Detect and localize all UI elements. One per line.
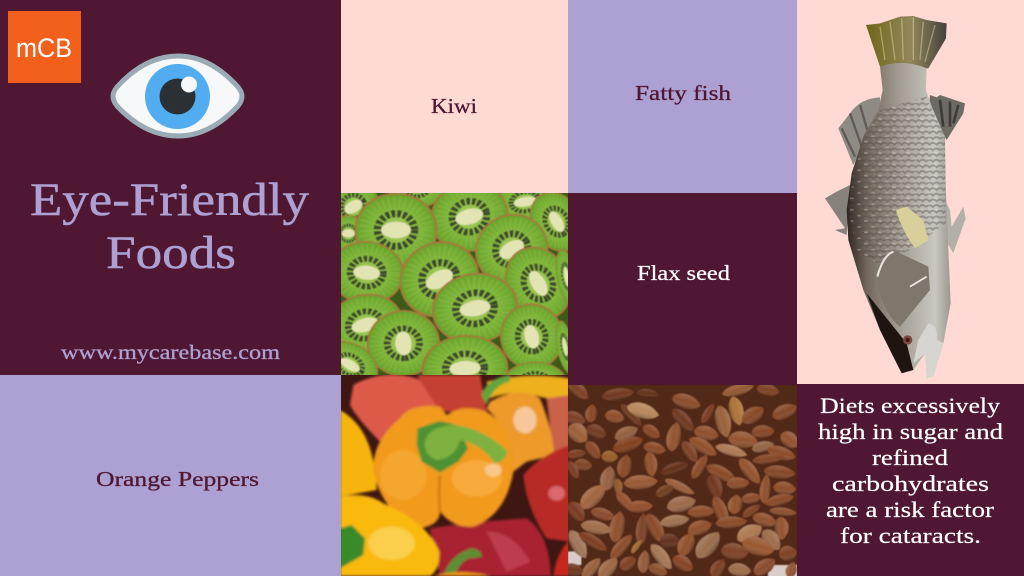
pepper: red right <box>523 445 570 542</box>
pepper: red back far right <box>547 395 570 455</box>
logo: mCB <box>8 11 81 83</box>
panel: flax seed label <box>568 193 797 385</box>
title <box>30 174 310 279</box>
panel: kiwi label <box>341 0 568 193</box>
label: orange peppers: Orange Peppers <box>96 467 259 491</box>
fish tail <box>866 16 947 68</box>
fish fins <box>825 95 966 253</box>
pepper: orange back right <box>487 392 554 472</box>
text: cataract risk statement: high in sugar and <box>818 419 1003 444</box>
photo: peppers <box>340 375 570 576</box>
icon: eye <box>113 56 242 136</box>
label: kiwi: Kiwi <box>431 94 477 118</box>
photo: fish <box>825 16 966 378</box>
text: cataract risk statement: refined <box>872 445 948 470</box>
fish scales <box>848 97 946 263</box>
text: cataract risk statement: are a risk factor <box>826 497 995 522</box>
text: cataract risk statement: carbohydrates <box>832 471 989 496</box>
panel: fatty fish label <box>568 0 797 193</box>
label: fatty fish: Fatty fish <box>635 81 731 105</box>
pepper: orange main <box>373 406 514 528</box>
fish body <box>847 63 951 378</box>
stem: back <box>482 375 510 405</box>
pepper: yellow back right <box>485 375 568 400</box>
text: cataract risk statement: for cataracts. <box>840 523 981 548</box>
logo: mCB: mCB <box>16 33 72 63</box>
text: cataract risk statement <box>818 393 1003 548</box>
photo: kiwi slices <box>341 193 568 375</box>
pepper: red back left <box>350 375 437 445</box>
title: Eye-Friendly <box>30 174 310 226</box>
title: Foods <box>106 227 236 279</box>
panel: orange peppers label <box>0 375 341 576</box>
fish head <box>913 323 943 378</box>
label: flax seed: Flax seed <box>637 261 730 285</box>
fish gill <box>877 252 930 327</box>
fish pectoral fin <box>896 207 928 248</box>
stem: bottom <box>443 548 482 576</box>
panel: cataract text <box>797 384 1024 576</box>
pepper: yellow left <box>340 410 377 497</box>
panel: fish background <box>797 0 1024 384</box>
pepper: red back centre <box>417 375 487 412</box>
pepper: red bottom <box>430 518 551 576</box>
website url: www.mycarebase.com <box>61 342 281 364</box>
stem: main calyx <box>417 421 468 473</box>
pepper: yellow bottom <box>340 495 439 576</box>
panel: title background <box>0 0 341 375</box>
text: cataract risk statement: Diets excessively <box>820 393 1001 418</box>
photo: flax seeds <box>562 376 803 576</box>
